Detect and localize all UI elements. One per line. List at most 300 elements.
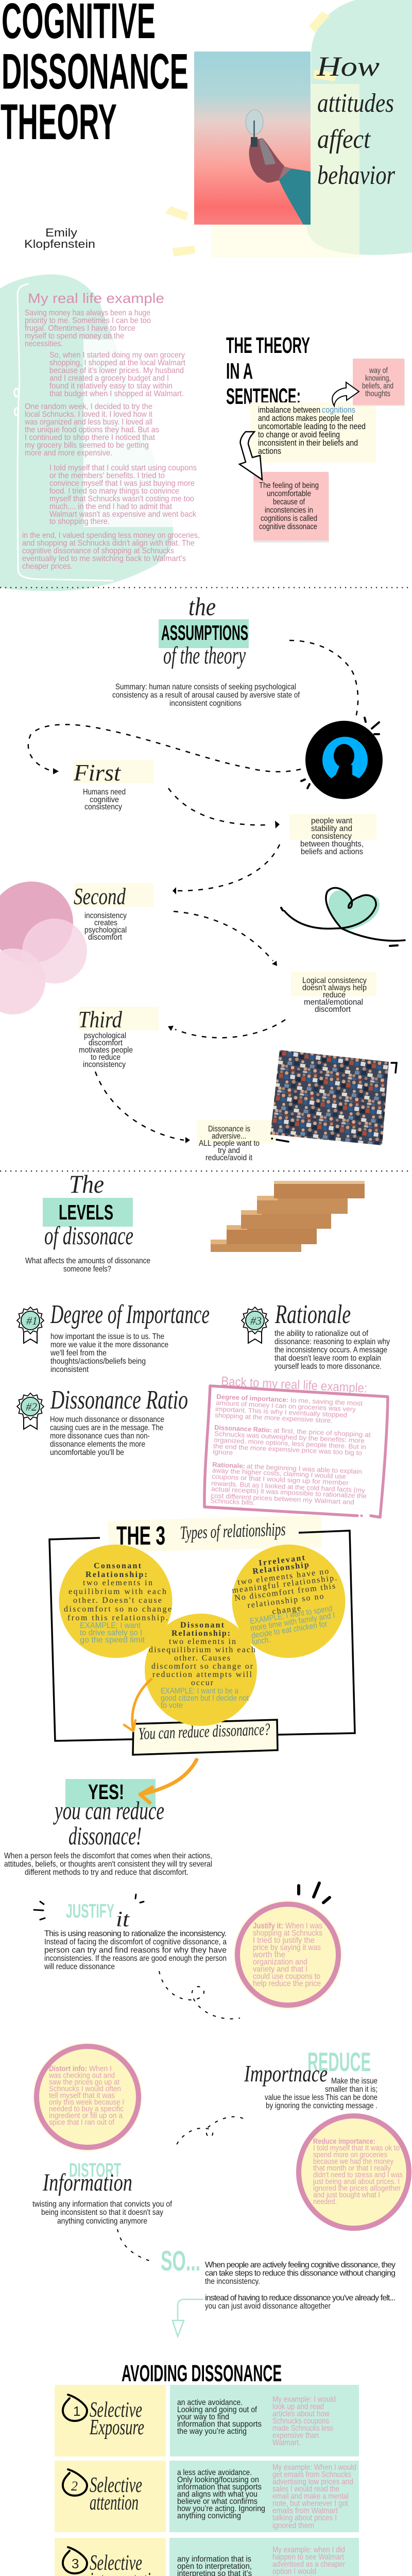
- heading: the levels of dissonance: LEVELS: [59, 1200, 113, 1224]
- row: selective attention: attention: [90, 2491, 139, 2515]
- row: selective interpretation: option I would: [272, 2567, 316, 2576]
- bubble: dissonant relationship: occur: [191, 1679, 214, 1687]
- callout: the theory definition: actions: [258, 446, 281, 456]
- bubble: dissonant relationship: reduction attempts will: [152, 1670, 252, 1679]
- assumption: logical consistency: Logical consistency: [302, 976, 367, 985]
- photo: crowd of people: [270, 1050, 397, 1145]
- method: justify it: inconsistencies. If the reasons are good enough the person: [44, 1954, 227, 1963]
- bubble: dissonant relationship: two elements in: [169, 1637, 236, 1646]
- text block: real life story: frugal. Oftentimes I have to force: [25, 324, 135, 333]
- assumption: second: [74, 883, 153, 942]
- text block: real life story: [22, 309, 200, 571]
- bubble: dissonant relationship: Dissonant: [180, 1621, 225, 1630]
- bubble: irrelevant relationship: meaningful relationship.: [231, 1573, 337, 1595]
- bubble: consonant relationship: other. Doesn't cause: [73, 1596, 162, 1605]
- assumption: second: Second: [74, 883, 126, 909]
- photo: hand holding a light bulb: [194, 52, 311, 225]
- summary: so: can take steps to reduce this dissonance without changing: [205, 2269, 396, 2278]
- circle: distort example: Distort info:: [49, 2064, 87, 2073]
- text: rationale example: coupons or that I would sign up for member: [212, 1472, 349, 1487]
- text: rationale example: at the beginning I was able to explain: [247, 1462, 362, 1476]
- text block: real life story: Saving money has always been a huge: [25, 309, 150, 317]
- row: selective attention: information that supports: [177, 2483, 262, 2492]
- icon: number 1: [63, 2395, 87, 2421]
- text block: real life story: food. I tried so many things to convince: [49, 487, 179, 496]
- assumption: people want stability: beliefs and actions: [301, 848, 363, 856]
- arrow: dashed to first: [28, 724, 301, 774]
- text: rationale example: rewards. But as I looked at the cold hard facts (my: [211, 1479, 366, 1494]
- method: distort information: anything convicting anymore: [57, 2217, 147, 2226]
- bubble: consonant relationship: to drive safely so I: [80, 1629, 142, 1637]
- assumption: dissonance is adversive: try and: [218, 1146, 240, 1155]
- bubble: dissonant relationship: [145, 1614, 257, 1726]
- heading: the assumptions of the theory: ASSUMPTIONS: [161, 621, 248, 645]
- sticky note: cognitive dissonance definition: uncomfortable: [267, 489, 311, 498]
- assumption: people want stability: consistency: [312, 832, 352, 841]
- bubble: irrelevant relationship: decide to eat chicken for: [251, 1620, 328, 1640]
- circle: distort example: saw the prices go up at: [49, 2078, 120, 2087]
- row: selective exposure: articles about how: [272, 2410, 330, 2418]
- circle: distort example: ingredient or fill up on a: [49, 2111, 123, 2120]
- circle: justify example: organization and: [253, 1958, 307, 1967]
- bubble: irrelevant relationship: relationship so no: [247, 1592, 324, 1610]
- sticky note: cognitive dissonance definition: cognitions is called: [261, 514, 317, 523]
- bubble: irrelevant relationship: change: [271, 1604, 301, 1616]
- method: reduce importance: Make the issue: [331, 2077, 377, 2086]
- level 2: dissonance ratio: [17, 1385, 188, 1457]
- row: selective attention: Only looking/focusing on: [177, 2476, 259, 2484]
- circle: reduce example: because we had the money: [313, 2157, 393, 2166]
- circle: justify example: I tried to justify the: [253, 1936, 315, 1945]
- title: DISSONANCE: [2, 43, 188, 99]
- bubble: consonant relationship: EXAMPLE: I want: [80, 1621, 141, 1630]
- assumption: second: inconsistency: [84, 911, 127, 920]
- arrow: dashed to third: [168, 1020, 285, 1038]
- level 2: dissonance ratio: dissonance elements the more: [50, 1440, 145, 1449]
- bubble: consonant relationship: [59, 1545, 172, 1658]
- bubble: consonant relationship: two elements in: [83, 1579, 152, 1587]
- level 2: dissonance ratio: more dissonance cues than non-: [50, 1432, 150, 1440]
- heading: the theory in a sentence: IN A: [226, 359, 253, 384]
- level 1: degree of importance: how important the issue is to us. The: [50, 1332, 164, 1341]
- circle: reduce example: I told myself that It was ok to: [313, 2144, 400, 2153]
- circle: distort example: spice that I ran out of: [49, 2118, 115, 2127]
- arrow: dashed to stability: [168, 788, 280, 828]
- arrow: dashed loop to distort: [159, 1971, 240, 2019]
- text block: real life story: shopping, I shopped at the local Walmart: [49, 359, 185, 367]
- row: selective exposure: expensive than: [272, 2431, 319, 2440]
- heading: the assumptions of the theory: the: [188, 592, 216, 621]
- circle: justify example: Justify it:: [253, 1922, 283, 1930]
- background blob: header: [305, 0, 412, 255]
- subtitle: how attitudes affect behavior: affect: [317, 125, 371, 154]
- author: Klopfenstein: [24, 238, 95, 250]
- text block: reduce intro: different methods to try and reduce that discomfort.: [25, 1868, 188, 1877]
- row: selective attention: how you’re acting. Ignoring: [177, 2504, 265, 2513]
- text block: real life story: that budget when I shopped at Walmart.: [49, 389, 184, 398]
- row: selective interpretation: My example: when I did: [272, 2546, 345, 2554]
- circle: justify example: help reduce the price: [253, 1979, 321, 1988]
- method: justify it: JUSTIFY: [66, 1901, 114, 1922]
- heading: the 3 types of relationships: Types of relationships: [180, 1519, 286, 1543]
- heading: the theory in a sentence: [226, 333, 310, 409]
- assumption: third: [78, 1006, 159, 1069]
- text block: real life story: I continued to shop there I noticed that: [25, 433, 156, 442]
- summary: so: When people are actively feeling cognitive dissonance, they: [205, 2261, 396, 2269]
- assumption: third: Third: [78, 1006, 123, 1032]
- text block: real life story: local Schnucks. I loved it. I loved how it: [25, 410, 152, 419]
- image: wooden block stairs: [211, 1181, 365, 1252]
- row: selective exposure: Exposure: [89, 2416, 144, 2439]
- text block: real life story: priority to me. Sometimes I can be too: [25, 316, 151, 325]
- callout: the theory definition: and actions makes people feel: [258, 413, 353, 423]
- assumption: third: psychological: [84, 1031, 126, 1040]
- icon: number 2: 2: [71, 2479, 78, 2494]
- assumption: second: creates: [94, 919, 117, 927]
- circle: distort example: When I: [89, 2064, 112, 2073]
- row: selective exposure: Looking and going out of: [177, 2405, 257, 2414]
- row: selective exposure: [55, 2385, 359, 2456]
- level 3: rationale: yourself leads to more dissonance.: [274, 1362, 382, 1371]
- heading: the levels of dissonance: What affects the amounts of dissonance: [25, 1257, 150, 1265]
- row: selective attention: emails from Walmart: [272, 2506, 338, 2515]
- icon: ribbon #2: [17, 1393, 44, 1429]
- text: rationale example: away the higher costs, claiming I would use: [212, 1466, 346, 1480]
- method: reduce importance: by ignoring the convicting message .: [266, 2102, 377, 2110]
- text block: real life story: and shopping at Schnucks didn't align with that. The: [22, 539, 195, 548]
- row: selective attention: My example: When I would: [272, 2463, 356, 2472]
- text: dissonance ratio example: ignore: [213, 1448, 233, 1456]
- callout: the theory definition: to change or avoid feeling: [258, 430, 340, 439]
- bubble: consonant relationship: go the speed limit: [80, 1636, 145, 1645]
- method: justify it: [34, 1894, 227, 1971]
- circle: reduce example: ignored the prices altogether: [313, 2184, 401, 2193]
- circle: reduce example: [299, 2116, 409, 2228]
- assumption: logical consistency: [291, 972, 376, 1014]
- row: selective exposure: your way to find: [177, 2413, 229, 2421]
- method: distort information: [32, 2160, 172, 2226]
- sticky note: cognitions definition: [353, 359, 405, 406]
- method: distort information: twisting any information that convicts you of: [32, 2200, 172, 2209]
- assumption: people want stability: stability and: [311, 824, 352, 833]
- bubble: consonant relationship: from this relationship.: [67, 1614, 168, 1622]
- row: selective attention: talking about prices I: [272, 2514, 337, 2522]
- sticky note: cognitions definition: way of: [369, 366, 388, 375]
- text block: real life story: and I created a grocery budget and I: [49, 374, 169, 383]
- circle: reduce example: needed.: [313, 2197, 337, 2206]
- bubble: irrelevant relationship: more time with family and I: [250, 1611, 336, 1633]
- bubble: irrelevant relationship: No discomfort from this: [234, 1582, 336, 1603]
- sticky note: cognitions definition: thoughts: [365, 389, 390, 398]
- frame: relationships outline: [49, 1531, 355, 1741]
- row: selective exposure: Walmart.: [272, 2438, 301, 2447]
- text: dissonance ratio example: at first, the price of shopping at: [273, 1426, 371, 1438]
- text block: assumptions summary: Summary: human nature consists of seeking psychological: [115, 683, 296, 691]
- row: selective interpretation: Selective: [90, 2551, 142, 2575]
- arrow: dashed to second: [173, 844, 280, 894]
- assumption: first: cognitive: [90, 795, 119, 804]
- text: rationale example: cost different prices between my Walmart and: [211, 1492, 354, 1506]
- text block: real life story: or the members' benefits. I tried to: [49, 471, 165, 480]
- circle: justify example: could use coupons to: [253, 1972, 320, 1981]
- assumption: first: First: [73, 759, 121, 786]
- arrow: dashed to dissonance is adversive: [95, 1072, 190, 1143]
- row: selective attention: note, but whenever I got: [272, 2499, 348, 2508]
- icon: number 2: [63, 2469, 87, 2496]
- sticky note: cognitive dissonance definition: inconstencies in: [265, 506, 313, 515]
- row: selective interpretation: any information that is: [177, 2555, 251, 2564]
- level 3: rationale: dissonance: reasoning to explain why: [274, 1337, 390, 1346]
- level 1: degree of importance: more we value it the more dissonance: [50, 1341, 168, 1349]
- text: degree of importance example: shopping at the more expensive store.: [215, 1411, 333, 1425]
- bubble: dissonant relationship: Relationship:: [171, 1629, 230, 1638]
- assumption: logical consistency: doesn't always help: [302, 984, 367, 992]
- heading: the theory in a sentence: THE THEORY: [226, 333, 310, 358]
- assumption: first: [73, 759, 153, 811]
- method: reduce importance: [244, 2047, 377, 2110]
- text: dissonance ratio example: the end the more expensive price was too big to: [213, 1442, 362, 1457]
- icon: number 1: 1: [73, 2403, 80, 2419]
- callout: you can reduce dissonance question: You can reduce dissonance?: [138, 1720, 270, 1743]
- text block: real life story: much.... in the end I had to admit that: [49, 502, 172, 511]
- title: [1, 0, 188, 150]
- circle: justify example: [233, 1883, 342, 2009]
- subtitle: how attitudes affect behavior: behavior: [317, 161, 396, 190]
- circle: distort example: [33, 2042, 142, 2151]
- text block: real life story: to shopping there.: [49, 517, 110, 526]
- heading: yes you can reduce dissonance: YES!: [88, 1780, 124, 1804]
- author: Emily: [45, 226, 77, 239]
- summary: so: you can just avoid dissonance altogether: [205, 2302, 331, 2311]
- sticky note: cognitive dissonance definition: The feeling of being: [259, 481, 319, 490]
- arrow: dashed to silhouette: [289, 640, 358, 719]
- decorative yellow tabs: [165, 11, 337, 257]
- assumption: logical consistency: reduce: [323, 991, 346, 999]
- panel: my real life example: [0, 274, 200, 591]
- text: degree of importance example: [215, 1393, 363, 1425]
- row: selective attention: believe or what confirms: [177, 2497, 258, 2506]
- heading: yes you can reduce dissonance: dissonace!: [68, 1821, 142, 1850]
- level 1: degree of importance: thoughts/actions/beliefs being: [50, 1357, 146, 1366]
- text: rationale example: Rationale:: [212, 1461, 245, 1470]
- text block: real life story: myself that Schnucks wasn't costing me too: [49, 495, 194, 503]
- author: [24, 226, 95, 250]
- method: reduce importance: smaller than it is;: [325, 2085, 377, 2094]
- method: reduce importance: Importnace: [244, 2060, 328, 2087]
- row: selective attention: get emails from Schnucks: [272, 2470, 351, 2479]
- assumption: third: to reduce: [91, 1053, 121, 1062]
- row: selective interpretation: happen to see Walmart: [272, 2553, 344, 2562]
- heading: the theory in a sentence: SENTENCE:: [226, 384, 301, 409]
- icon: ribbon #3: [242, 1307, 268, 1343]
- circle: justify example: worth the: [252, 1951, 285, 1959]
- row: selective attention: and aligns with what you: [177, 2490, 258, 2499]
- text: rationale example: actual receipts) it was impossible to rationalize the: [211, 1485, 367, 1500]
- circle: justify example: shopping at Schnucks: [253, 1929, 322, 1938]
- level 3: rationale: [242, 1300, 390, 1371]
- row: selective exposure: Selective: [90, 2398, 142, 2422]
- heading: the 3 types of relationships: THE 3: [116, 1521, 165, 1550]
- arrow: down to dissonance note: [239, 432, 262, 480]
- heading: the levels of dissonance: of dissonace: [44, 1221, 133, 1250]
- bubble: irrelevant relationship: Irrelevant: [258, 1553, 305, 1568]
- icon: number 3: 3: [72, 2556, 79, 2571]
- row: selective attention: anything convicting: [177, 2512, 241, 2520]
- assumption: first: Humans need: [83, 788, 126, 796]
- row: selective exposure: the way you’re acting: [177, 2427, 247, 2436]
- bubble: consonant relationship: Relationship:: [85, 1570, 147, 1579]
- text block: real life story: found it relatively easy to stay within: [49, 382, 173, 391]
- circle: reduce example: just being anal about prices. I: [313, 2177, 400, 2186]
- icon: ribbon #3: #3: [250, 1314, 262, 1327]
- assumption: third: inconsistency: [83, 1060, 126, 1069]
- icon: person silhouette: [301, 718, 383, 799]
- icon: ribbon #1: #1: [26, 1314, 38, 1327]
- row: selective exposure: an active avoidance.: [177, 2398, 243, 2407]
- bubble: irrelevant relationship: Relationship: [252, 1561, 310, 1576]
- method: distort information: Information: [42, 2169, 132, 2196]
- panel: back to my real life example: [204, 1374, 388, 1517]
- text block: real life story: cheaper prices.: [22, 562, 73, 571]
- heading: yes you can reduce dissonance: you can reduce: [53, 1796, 164, 1825]
- subtitle: how attitudes affect behavior: attitudes: [317, 89, 394, 118]
- text block: real life story: Walmart wasn't as expensive and went back: [49, 510, 197, 519]
- circle: reduce example: Reduce importance:: [313, 2137, 375, 2146]
- heading: the assumptions of the theory: of the theory: [163, 642, 246, 669]
- row: selective attention: advertising low prices and: [272, 2478, 353, 2486]
- bubble: consonant relationship: Consonant: [94, 1562, 142, 1570]
- callout: the theory definition: [250, 402, 376, 463]
- row: selective interpretation: advertised as a cheaper: [272, 2560, 346, 2569]
- row: selective exposure: look up and read: [272, 2402, 324, 2411]
- assumption: third: discomfort: [89, 1039, 123, 1047]
- assumption: people want stability: between thoughts,: [300, 840, 364, 849]
- method: justify it: person can try and find reasons for why they have: [44, 1946, 227, 1955]
- row: selective exposure: Schnucks coupons: [272, 2417, 329, 2426]
- arrow: up to cognitions note: [332, 382, 359, 406]
- sticky note: cognitions definition: beliefs, and: [362, 382, 393, 391]
- assumption: people want stability: people want: [311, 817, 353, 825]
- circle: distort example: only this week because I: [49, 2098, 124, 2107]
- subtitle: how attitudes affect behavior: [316, 51, 396, 190]
- row: selective exposure: My example: I would: [272, 2395, 336, 2404]
- row: selective exposure: made Schnucks less: [272, 2424, 333, 2433]
- text: rationale example: Schnucks bills.: [210, 1497, 255, 1506]
- bubble: irrelevant relationship: [231, 1545, 345, 1658]
- text block: real life story: I told myself that I could start using coupons: [49, 464, 197, 472]
- icon: ribbon #1: [17, 1307, 44, 1343]
- text block: real life story: convince myself that I was just buying more: [49, 479, 195, 488]
- assumption: logical consistency: discomfort: [315, 1005, 351, 1014]
- heading: the 3 types of relationships: [116, 1519, 286, 1550]
- assumption: dissonance is adversive: reduce/avoid it: [205, 1154, 252, 1162]
- text block: reduce intro: [4, 1852, 212, 1877]
- banner background: the 3 types of relationships: [108, 1515, 322, 1552]
- level 1: degree of importance: inconsistent: [50, 1365, 89, 1374]
- assumption: dissonance is adversive: adversive...: [212, 1132, 246, 1141]
- row: selective attention: [55, 2461, 359, 2532]
- text block: real life story: was organized and less busy. I loved all: [24, 418, 152, 427]
- row: selective interpretation: [55, 2538, 359, 2576]
- arrow: dashed to logical consistency: [174, 911, 277, 966]
- arrow: dashed to so: [117, 2229, 154, 2262]
- circle: distort example: Schnucks I would often: [49, 2084, 121, 2093]
- text: rationale example: [210, 1461, 367, 1506]
- background panel: pale yellow header block: [211, 84, 359, 258]
- level 3: rationale: the inconsistency occurs. A message: [274, 1346, 387, 1354]
- icon: hand-drawn heart: [281, 888, 405, 946]
- circle: distort example: was checking out and: [48, 2071, 115, 2080]
- row: selective exposure: information that supports: [177, 2420, 262, 2429]
- method: reduce importance: value the issue less This can be done: [265, 2093, 377, 2102]
- assumption: dissonance is adversive: [197, 1120, 276, 1162]
- assumption: people want stability: [289, 814, 376, 856]
- text block: real life story: One random week, I decided to try the: [25, 402, 152, 411]
- text block: real life story: more and more expensive.: [25, 449, 112, 457]
- icon: number 3: [63, 2547, 87, 2573]
- heading: the levels of dissonance: someone feels?: [63, 1265, 111, 1274]
- level 2: dissonance ratio: causing cues are in the message. The: [50, 1423, 163, 1432]
- callout: the theory definition: imbalance between: [258, 405, 320, 415]
- row: selective attention: a less active avoidance.: [177, 2468, 252, 2477]
- text block: assumptions summary: inconsistent cognitions: [169, 699, 242, 708]
- level 2: dissonance ratio: How much dissonance or dissonance: [50, 1415, 164, 1424]
- circle: reduce example: that month or that I really: [313, 2164, 391, 2173]
- bubble: irrelevant relationship: EXAMPLE: I want to spend: [249, 1604, 333, 1626]
- bubble: dissonant relationship: disequilibrium with each: [149, 1646, 255, 1654]
- summary: so: [161, 2245, 396, 2311]
- method: justify it: This is using reasoning to rationalize the inconsistency.: [44, 1929, 227, 1938]
- bubble: dissonant relationship: other. Causes: [174, 1654, 230, 1663]
- callout: you can reduce dissonance question: [133, 1720, 278, 1755]
- row: selective attention: ignored them: [272, 2521, 314, 2530]
- heading: the levels of dissonance: [25, 1170, 150, 1274]
- level 1: degree of importance: [17, 1300, 210, 1374]
- method: justify it: it: [116, 1908, 130, 1931]
- text block: real life story: necessities.: [25, 340, 63, 348]
- text block: assumptions summary: [112, 683, 300, 708]
- text: degree of importance example: to me, saving the most: [290, 1396, 363, 1407]
- bubble: dissonant relationship: EXAMPLE: I want to be a: [161, 1687, 238, 1696]
- text: dissonance ratio example: Dissonance Ratio:: [214, 1423, 272, 1434]
- bubble: irrelevant relationship: two elements have no: [237, 1567, 329, 1587]
- text: degree of importance example: amount of money I can on groceries was very: [216, 1399, 356, 1413]
- arrow: dashed loop to reduce: [176, 2116, 243, 2148]
- text block: real life story: the unique food options they had. But as: [25, 426, 159, 434]
- text block: reduce intro: attitudes, beliefs, or thoughts aren't consistent they will try several: [4, 1860, 212, 1869]
- level 3: rationale: that doesn't leave room to explain: [274, 1354, 381, 1363]
- row: selective attention: Selective: [90, 2473, 142, 2497]
- summary: so: the inconsistency.: [205, 2277, 260, 2286]
- level 3: rationale: the ability to rationalize out of: [274, 1329, 368, 1338]
- assumption: logical consistency: mental/emotional: [304, 998, 363, 1007]
- panel: back to my real life example: Back to my real life example:: [221, 1374, 368, 1396]
- bubble: irrelevant relationship: lunch.: [251, 1636, 271, 1647]
- arrow: orange to yes: [140, 1758, 197, 1804]
- circle: justify example: When I was: [285, 1922, 322, 1930]
- text block: real life story: myself to spend money on the: [25, 332, 124, 341]
- callout: the theory definition: inconsistent in their beliefs and: [258, 438, 358, 448]
- text block: real life story: my grocery bills seemed to be getting: [25, 441, 149, 450]
- circle: reduce example: and just bought what I: [313, 2191, 380, 2199]
- text block: real life story: So, when I started doing my own grocery: [49, 351, 185, 360]
- text block: reduce intro: When a person feels the discomfort that comes when their actions,: [4, 1852, 212, 1860]
- assumption: second: psychological: [84, 926, 127, 935]
- arrow: orange down to question: [124, 1679, 151, 1731]
- text block: real life story: eventually led to me switching back to Walmart's: [22, 554, 186, 563]
- text: degree of importance example: important. This is why I eventually stopped: [215, 1405, 347, 1419]
- callout: the theory definition: cognitions: [322, 405, 355, 415]
